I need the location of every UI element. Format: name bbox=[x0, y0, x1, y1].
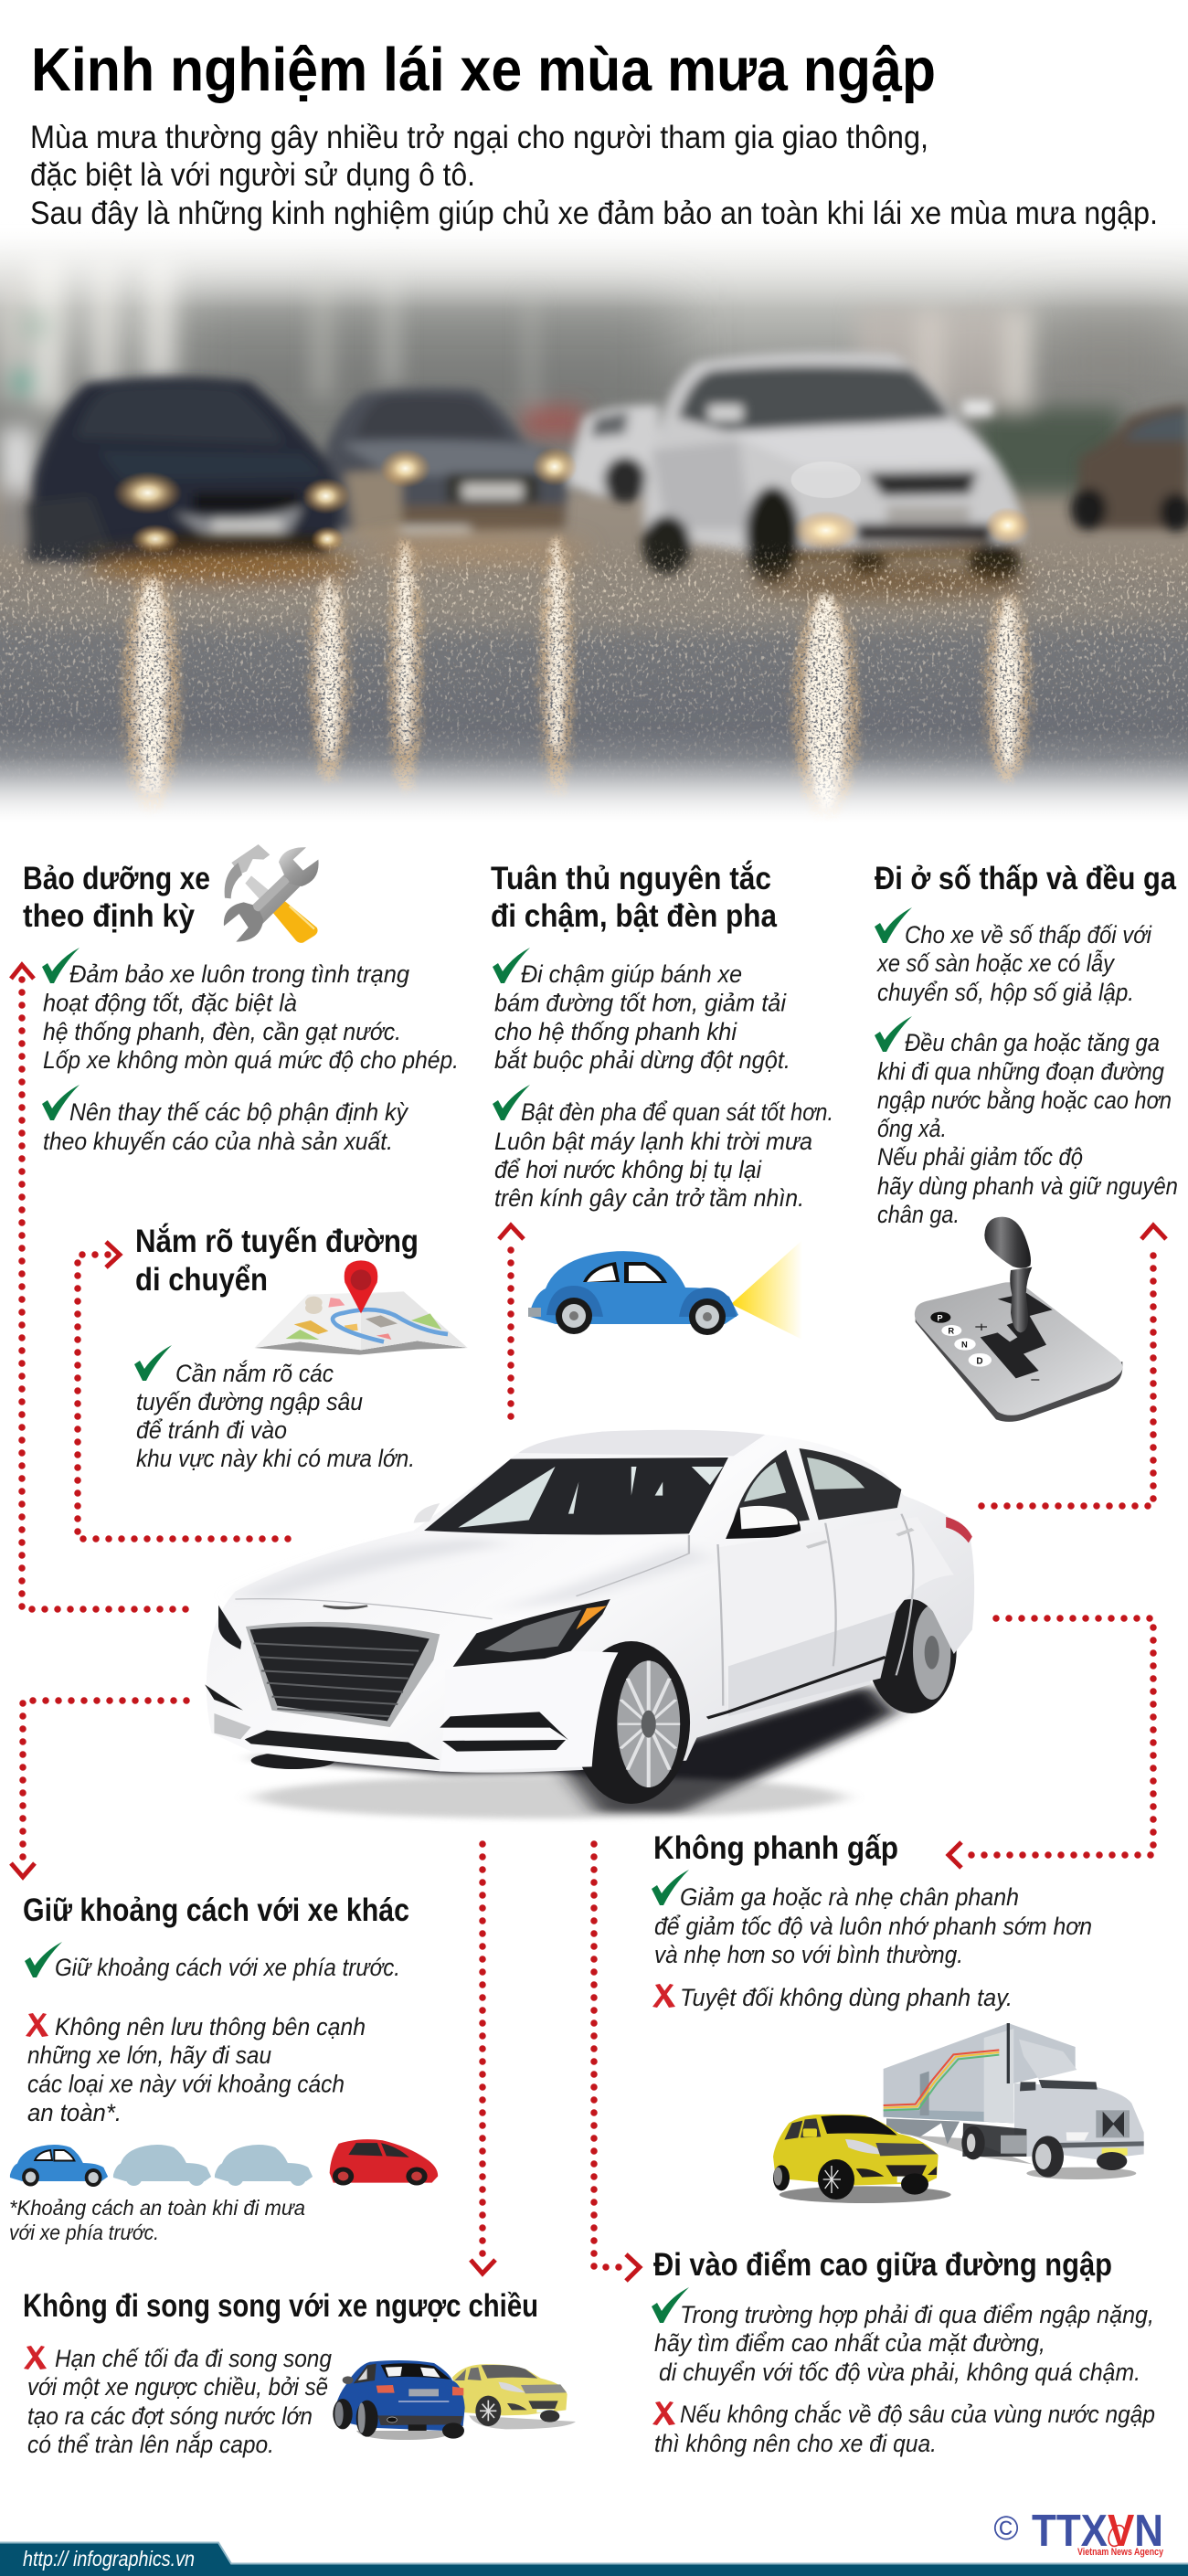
icon: automatic gear shifter: D bbox=[976, 1356, 983, 1366]
tip 1: Lốp xe không mòn quá mức độ cho phép. bbox=[43, 1046, 459, 1074]
tip: don't: Hạn chế tối đa đi song song bbox=[55, 2345, 332, 2372]
footer band with URL bbox=[0, 2542, 1188, 2576]
heading: Không đi song song với xe ngược chiều bbox=[23, 2288, 538, 2324]
tip 2: Nếu phải giảm tốc độ bbox=[877, 1143, 1083, 1171]
tip 2: Luôn bật máy lạnh khi trời mưa bbox=[494, 1128, 812, 1155]
heading: đi chậm, bật đèn pha bbox=[491, 898, 777, 934]
safe-distance car row bbox=[10, 2139, 438, 2187]
panel: vehicle maintenance bbox=[23, 844, 459, 1155]
tip 2: theo khuyến cáo của nhà sản xuất. bbox=[43, 1128, 393, 1155]
tip 2: Bật đèn pha để quan sát tốt hơn. bbox=[521, 1098, 833, 1126]
icon: automatic gear shifter: P bbox=[937, 1313, 943, 1322]
tip 1 bbox=[493, 948, 790, 1074]
far right car bbox=[1076, 405, 1188, 529]
icon: automatic gear shifter: R bbox=[948, 1327, 954, 1336]
intro paragraph bbox=[30, 120, 1158, 231]
illustration: truck and yellow car bbox=[773, 2023, 1144, 2203]
icon: automatic gear shifter: N bbox=[961, 1341, 968, 1350]
connector: centre-down dotted arrow bbox=[471, 1844, 495, 2274]
logo: TTXVN: Vietnam News Agency bbox=[1077, 2547, 1164, 2558]
tip 1: hệ thống phanh, đèn, cần gạt nước. bbox=[43, 1018, 401, 1045]
tip: don't: với một xe ngược chiều, bởi sẽ bbox=[27, 2373, 328, 2401]
tip: do: hãy tìm điểm cao nhất của mặt đường, bbox=[654, 2329, 1045, 2357]
tip: don't: các loại xe này với khoảng cách bbox=[27, 2071, 345, 2098]
tip: khu vực này khi có mưa lớn. bbox=[136, 1445, 415, 1472]
title: Kinh nghiệm lái xe mùa mưa ngập bbox=[31, 36, 936, 104]
tip 1 bbox=[875, 907, 1152, 1006]
logo: TTXVN: © bbox=[993, 2509, 1019, 2547]
tip: don't: thì không nên cho xe đi qua. bbox=[654, 2430, 937, 2457]
heading: theo định kỳ bbox=[23, 898, 195, 934]
tip: don't: Không nên lưu thông bên cạnh bbox=[55, 2013, 366, 2041]
tip 2: chân ga. bbox=[877, 1201, 960, 1228]
tip 2 bbox=[875, 1016, 1178, 1228]
tip: do bbox=[25, 1942, 400, 1981]
tip: do: để giảm tốc độ và luôn nhớ phanh sớm hơn bbox=[654, 1913, 1092, 1940]
headlight glows bbox=[113, 447, 1031, 554]
tip 2: Nên thay thế các bộ phận định kỳ bbox=[69, 1098, 408, 1126]
tip 2: trên kính gây cản trở tầm nhìn. bbox=[494, 1184, 804, 1212]
panel: slow driving and headlights bbox=[491, 860, 833, 1340]
tip: don't: có thể tràn lên nắp capo. bbox=[27, 2430, 274, 2458]
panel: keep distance bbox=[9, 1892, 438, 2244]
panel: know your route bbox=[134, 1223, 468, 1472]
tip 1: hoạt động tốt, đặc biệt là bbox=[43, 989, 297, 1016]
tip 1: Đảm bảo xe luôn trong tình trạng bbox=[69, 960, 409, 988]
icon: ghost car 2 bbox=[215, 2145, 313, 2186]
heading bbox=[23, 861, 210, 934]
connector: right-down dotted arrow bbox=[949, 1618, 1153, 1868]
tip: do: Trong trường hợp phải đi qua điểm ngập nặng, bbox=[680, 2301, 1154, 2328]
tip 2: ống xả. bbox=[877, 1115, 947, 1142]
tip 1: Cho xe về số thấp đối với bbox=[905, 921, 1152, 949]
panel: no parallel with oncoming bbox=[23, 2288, 576, 2458]
connector: centre-right dotted arrow bbox=[594, 1844, 640, 2281]
heading: Không phanh gấp bbox=[653, 1830, 898, 1866]
footnote bbox=[9, 2196, 305, 2244]
heading: Nắm rõ tuyến đường bbox=[135, 1223, 419, 1259]
icon: map with pin bbox=[254, 1260, 468, 1355]
small white car bbox=[565, 405, 659, 496]
truck bbox=[884, 2023, 1144, 2179]
tip: do: di chuyển với tốc độ vừa phải, không quá chậm. bbox=[659, 2359, 1140, 2386]
panel: high point of flooded road bbox=[652, 2247, 1155, 2457]
tip: do: và nhẹ hơn so với bình thường. bbox=[654, 1941, 963, 1968]
central white sedan bbox=[205, 1430, 974, 1818]
heading bbox=[135, 1223, 419, 1298]
tip: don't bbox=[652, 2400, 1155, 2457]
tip 1: bắt buộc phải dừng đột ngột. bbox=[494, 1045, 790, 1074]
tip 1: Đi chậm giúp bánh xe bbox=[521, 960, 742, 988]
icon: ghost car 1 bbox=[113, 2145, 211, 2186]
footnote: *Khoảng cách an toàn khi đi mưa bbox=[9, 2196, 305, 2220]
tip 2: Đều chân ga hoặc tăng ga bbox=[905, 1029, 1160, 1056]
panel: no hard braking bbox=[652, 1830, 1144, 2203]
tip: tuyến đường ngập sâu bbox=[136, 1388, 363, 1415]
logo: TTXVN: TTXVN bbox=[1032, 2507, 1163, 2556]
tip 2 bbox=[42, 1085, 408, 1155]
heading: Đi vào điểm cao giữa đường ngập bbox=[653, 2247, 1112, 2283]
illustration: blue and yellow cars bbox=[333, 2360, 576, 2440]
tip: do bbox=[652, 2287, 1154, 2386]
tip: don't bbox=[26, 2013, 366, 2126]
heading: Giữ khoảng cách với xe khác bbox=[23, 1892, 409, 1928]
connector: down-left dotted arrow bbox=[11, 1701, 186, 1877]
heading: di chuyển bbox=[135, 1262, 268, 1298]
footer band with URL: http:// infographics.vn bbox=[23, 2547, 195, 2571]
icon: red car bbox=[330, 2139, 438, 2186]
footnote: với xe phía trước. bbox=[9, 2221, 159, 2244]
tip: don't bbox=[24, 2345, 332, 2458]
dark car bbox=[27, 377, 341, 563]
tip: don't: Tuyệt đối không dùng phanh tay. bbox=[680, 1984, 1013, 2011]
connector: route dotted arrow bbox=[78, 1242, 288, 1539]
tip 1: bám đường tốt hơn, giảm tải bbox=[494, 989, 787, 1016]
intro paragraph: đặc biệt là với người sử dụng ô tô. bbox=[30, 157, 475, 193]
tip: Cần nắm rõ các bbox=[175, 1359, 334, 1387]
tip: do: Giữ khoảng cách với xe phía trước. bbox=[55, 1954, 400, 1981]
icon: blue beetle small bbox=[10, 2145, 108, 2187]
tip: do bbox=[652, 1870, 1092, 1968]
tip bbox=[134, 1345, 415, 1472]
connector: centre-top dotted arrow bbox=[499, 1225, 524, 1416]
tip 2 bbox=[493, 1085, 833, 1212]
intro paragraph: Mùa mưa thường gây nhiều trở ngại cho người tham gia giao thông, bbox=[30, 120, 928, 155]
tip 1: xe số sàn hoặc xe có lẫy bbox=[875, 949, 1115, 977]
tip: don't: những xe lớn, hãy đi sau bbox=[27, 2041, 271, 2069]
main white car bbox=[643, 352, 1024, 558]
photo: cars driving in heavy rain bbox=[0, 218, 1188, 835]
tip 1: chuyển số, hộp số giả lập. bbox=[877, 979, 1134, 1006]
road speckle bbox=[9, 545, 1188, 769]
tip: don't: tạo ra các đợt sóng nước lớn bbox=[27, 2402, 313, 2430]
headlight reflections bbox=[122, 535, 1031, 822]
connector: top-left dotted arrow bbox=[11, 965, 186, 1609]
icon: hammer and wrench bbox=[224, 844, 319, 943]
tip: do: Giảm ga hoặc rà nhẹ chân phanh bbox=[680, 1883, 1019, 1911]
heading: Bảo dưỡng xe bbox=[23, 861, 210, 896]
yellow sedan bbox=[452, 2364, 576, 2429]
icon: automatic gear shifter bbox=[915, 1217, 1122, 1422]
panel: low gear bbox=[875, 861, 1178, 1422]
blue sedan bbox=[333, 2360, 465, 2440]
tip 2: để hơi nước không bị tụ lại bbox=[494, 1156, 762, 1183]
tip: để tránh đi vào bbox=[136, 1416, 287, 1444]
heading bbox=[491, 860, 777, 934]
second grey car bbox=[326, 388, 568, 529]
icon: blue beetle with headlight beam bbox=[528, 1240, 802, 1340]
tip 1: cho hệ thống phanh khi bbox=[494, 1018, 737, 1045]
heading: Tuân thủ nguyên tắc bbox=[491, 860, 771, 896]
tip 1 bbox=[42, 948, 459, 1074]
connector: right-top dotted arrow bbox=[981, 1225, 1166, 1506]
tip: don't: an toàn*. bbox=[27, 2099, 122, 2126]
yellow car bbox=[773, 2115, 951, 2203]
orange pool of light under cars bbox=[0, 535, 1188, 747]
